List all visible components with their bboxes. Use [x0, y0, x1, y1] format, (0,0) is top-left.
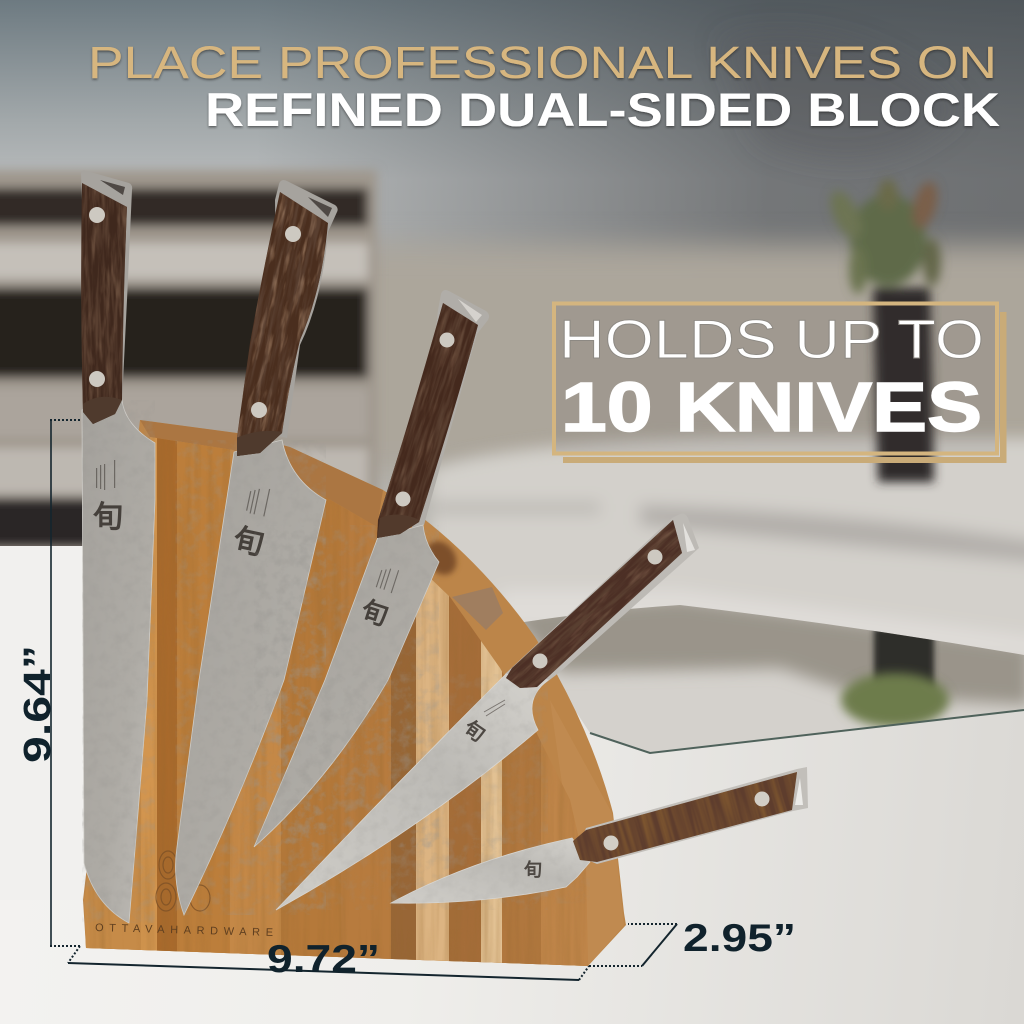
knife 5: paring knife: 旬 [523, 859, 542, 880]
blade [82, 400, 155, 923]
glass cooktop reflection [500, 598, 1024, 760]
left counter [0, 546, 100, 966]
knife 3: utility knife [254, 290, 489, 848]
logo mark: 旬 [93, 501, 123, 534]
callout: holds up to 10 knives: HOLDS UP TO [559, 308, 984, 370]
engraved brand name: OTTAVAHARDWARE [95, 922, 273, 939]
knife 4: petty knife [276, 520, 699, 910]
blurred plant and vase [824, 179, 942, 482]
dimension label: height: 9.64” [17, 645, 59, 763]
steel tang [81, 170, 132, 402]
blurred oven [0, 170, 377, 555]
knife 2: chef knife [175, 180, 338, 916]
engraved logo [156, 851, 210, 911]
wooden knife block [80, 400, 640, 980]
blurred sofa [425, 438, 1024, 700]
handle [81, 183, 127, 424]
knife 2: chef knife: 旬 [230, 523, 267, 561]
title [88, 37, 1000, 136]
dimension label: depth: 2.95” [683, 917, 796, 960]
knife 1: bread knife [81, 174, 156, 924]
block top and side face [80, 410, 640, 980]
front counter [0, 710, 1024, 1024]
knife 3: utility knife: 旬 [358, 595, 392, 631]
title: REFINED DUAL-SIDED BLOCK [205, 83, 1000, 136]
callout: holds up to 10 knives [554, 304, 1006, 463]
title: PLACE PROFESSIONAL KNIVES ON [88, 37, 997, 88]
knife 5: paring knife [390, 767, 808, 904]
callout: holds up to 10 knives: 10 KNIVES [561, 368, 982, 446]
dimension label: width: 9.72” [267, 938, 380, 981]
dimension lines [50, 420, 677, 980]
logo mark [93, 460, 123, 534]
knife 4: petty knife: 旬 [459, 715, 490, 746]
block front wood stripes [84, 437, 588, 966]
